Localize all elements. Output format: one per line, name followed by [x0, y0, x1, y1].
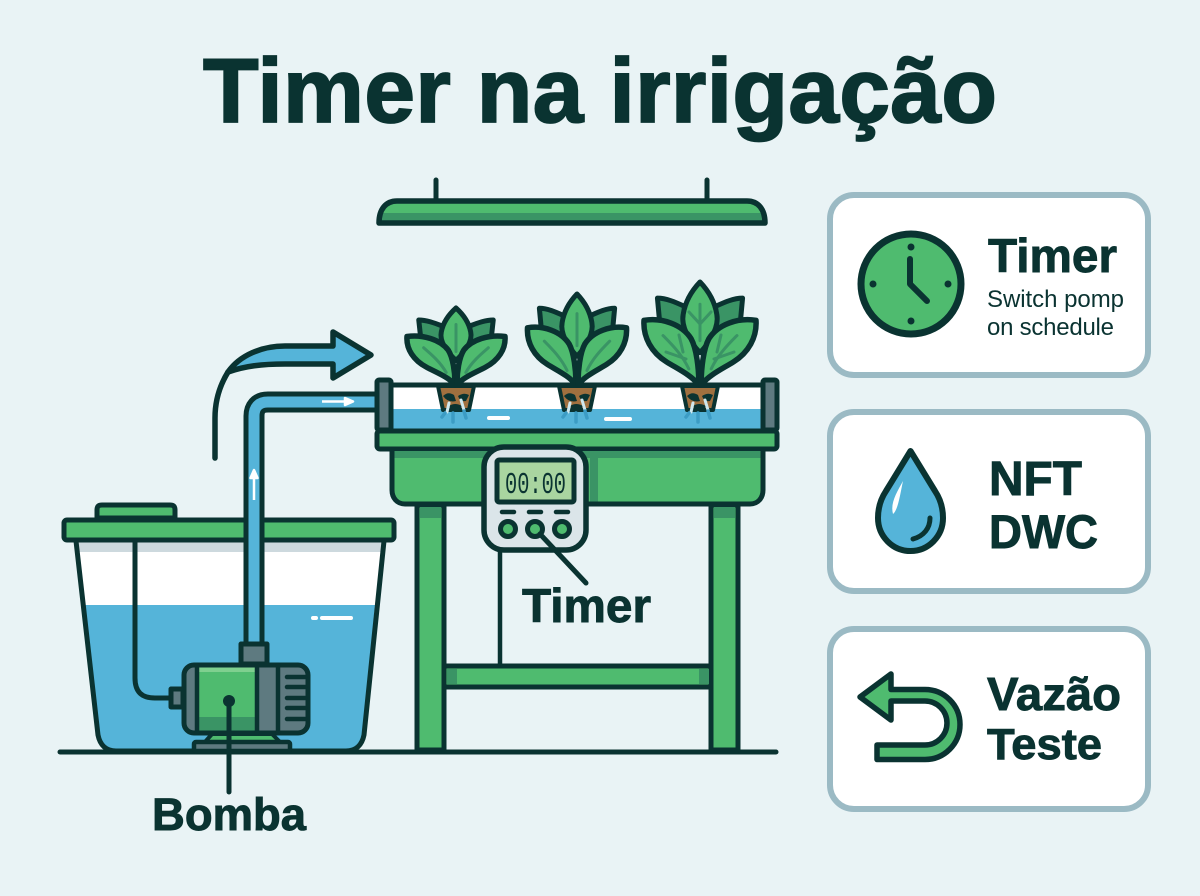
pump: [171, 644, 308, 751]
cross bar: [444, 666, 711, 687]
flow arrow vertical: [250, 470, 258, 500]
card: Timer: [830, 195, 1148, 375]
reservoir tank: [64, 505, 394, 751]
card heading: NFT: [989, 453, 1082, 506]
plant 2: [527, 294, 627, 422]
flow arrow horizontal: [322, 398, 353, 405]
table top: [377, 431, 777, 449]
channel end caps: [377, 380, 777, 430]
label: Bomba: Bomba: [152, 789, 307, 840]
pump base: [194, 734, 290, 751]
grow light: [379, 180, 765, 223]
pump body: [184, 665, 308, 733]
card heading: Teste: [987, 720, 1102, 769]
pot: [682, 386, 718, 422]
card: NFT DWC: [830, 412, 1148, 591]
card heading: [987, 668, 1121, 769]
tank lid: [64, 505, 394, 540]
right leg: [711, 505, 738, 750]
card description: [987, 286, 1124, 341]
timer buttons: [500, 512, 570, 536]
card heading: Vazão: [987, 668, 1121, 720]
label: Timer: [522, 534, 651, 632]
table: [377, 431, 777, 750]
timer cable: [498, 550, 502, 664]
plant 1: [407, 308, 505, 422]
icon: water drop: [878, 451, 943, 551]
pipe: [250, 398, 378, 645]
label: Bomba: [152, 695, 307, 840]
label: Timer: Timer: [522, 579, 651, 632]
icon: return arrow: [860, 674, 960, 760]
pump inlet: [171, 689, 183, 707]
flow direction arrow: [215, 332, 371, 458]
apron: [392, 451, 763, 504]
water highlight: [313, 616, 351, 620]
left leg: [417, 505, 444, 750]
ground line: [60, 750, 776, 754]
card description: Switch pomp: [987, 286, 1124, 313]
NFT channel: [377, 380, 777, 430]
card: Vazão Teste: [830, 629, 1148, 809]
title: Timer na irrigação: [203, 41, 997, 142]
icon: clock: [861, 234, 961, 334]
timer screen: 00:00: [505, 468, 566, 503]
hose: [135, 541, 172, 698]
card description: on schedule: [987, 314, 1114, 341]
pot: [438, 386, 474, 422]
timer device: [484, 447, 586, 550]
pump collar: [241, 644, 267, 664]
pot: [559, 386, 595, 422]
card heading: [989, 453, 1098, 558]
plant 3: [644, 282, 756, 422]
card heading: Timer: [988, 229, 1117, 282]
card heading: DWC: [989, 505, 1098, 558]
